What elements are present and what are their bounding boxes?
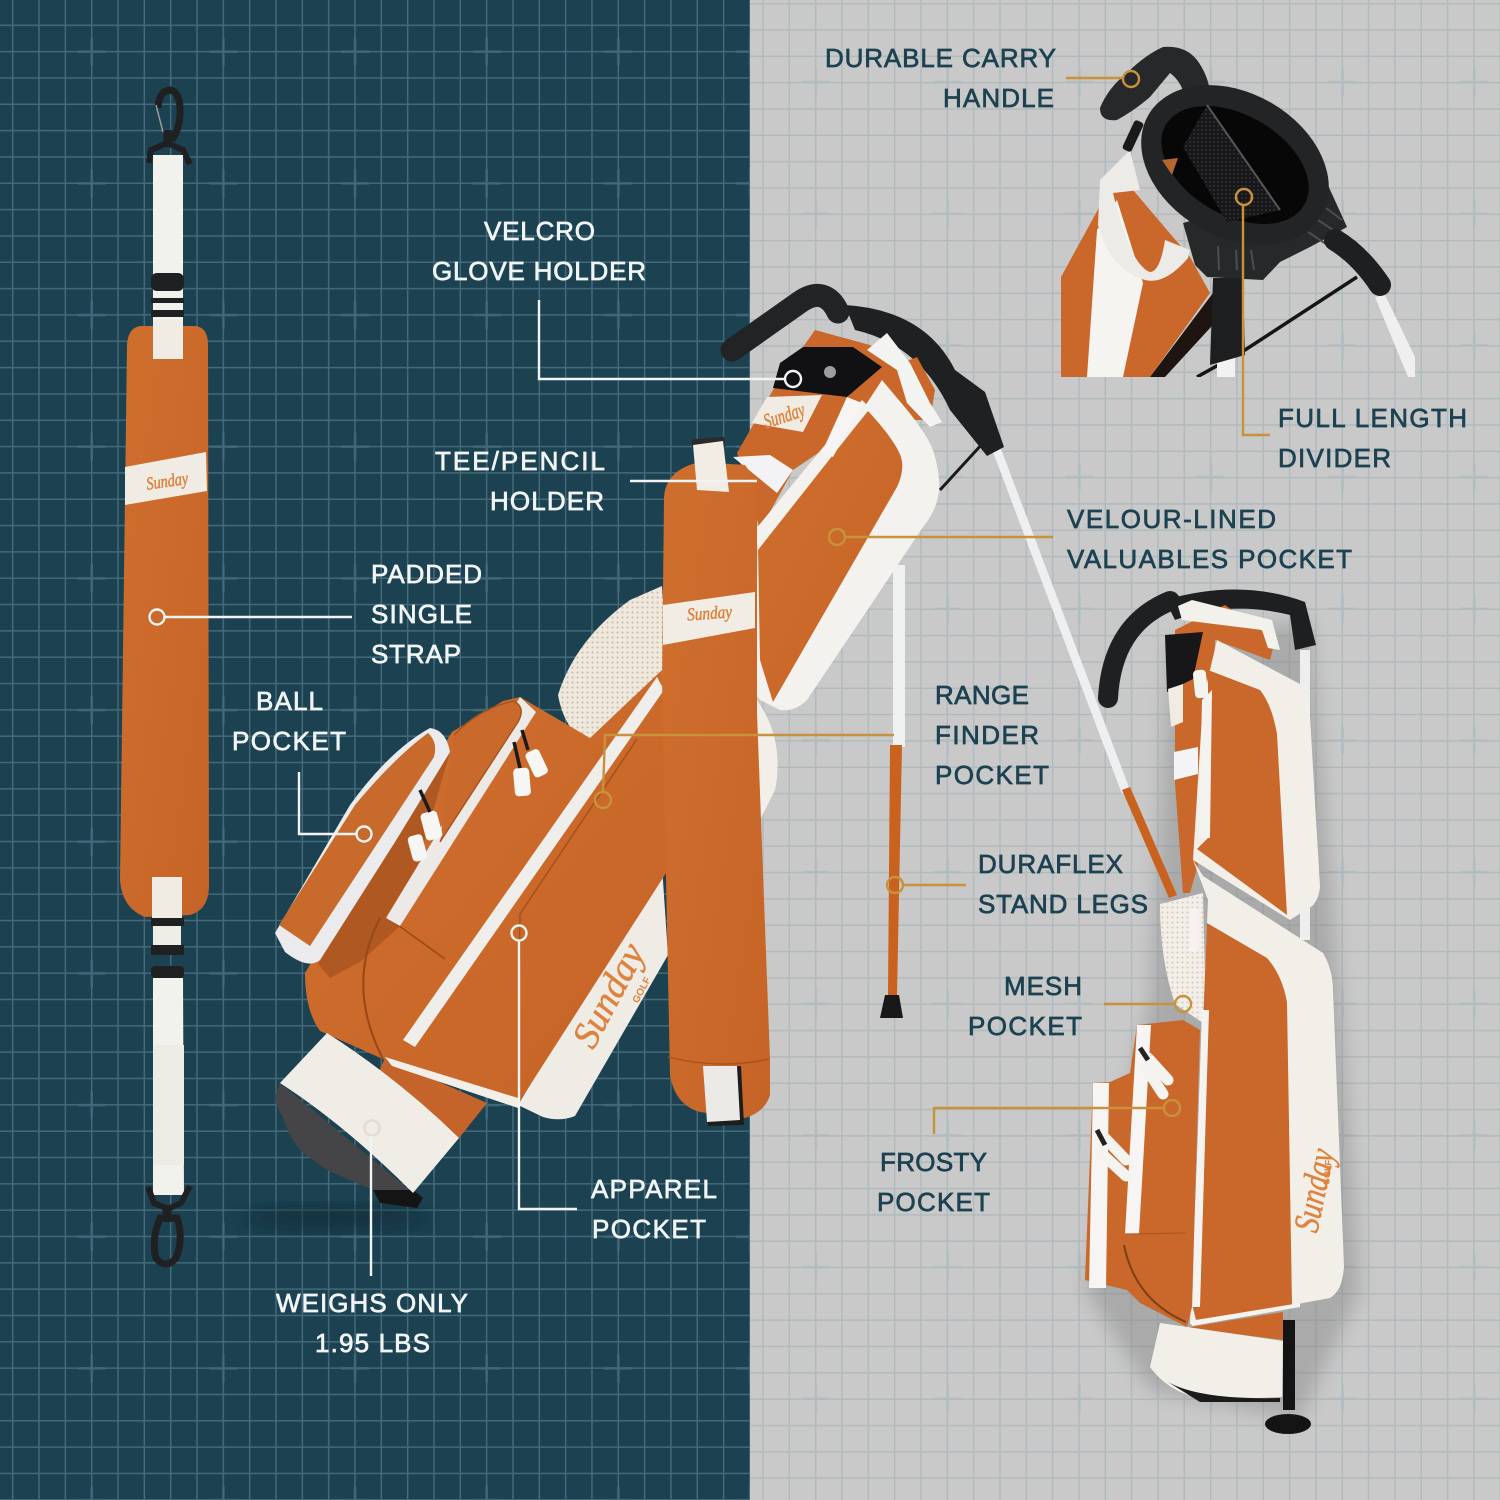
mesh divider [1183,105,1280,222]
label: weighs only: WEIGHS ONLY [276,1288,468,1318]
neck bracket [1210,278,1245,365]
upper orange pocket [1197,670,1287,915]
small label [1168,684,1183,727]
collar orange [737,330,935,530]
second zip strip [386,697,536,926]
upper white panel [755,380,939,710]
lower white panel [518,866,668,1119]
right leg tip [1375,295,1415,377]
label: range finder pocket: POCKET [935,760,1049,790]
bracket ribs [1218,208,1342,270]
side clip [1122,120,1144,152]
white hem [1190,1303,1300,1326]
callout: range finder pocket [595,735,894,808]
callout: weight [364,1120,380,1276]
label: range finder pocket: RANGE [935,680,1029,710]
rim crescent and bracket [845,305,1004,456]
label: durable carry handle: DURABLE CARRY [825,43,1056,73]
front stand leg [880,565,905,1018]
strap top tab [153,320,183,359]
middle pocket seam [363,918,383,1059]
strap logo band [663,592,755,645]
top rim [1165,589,1316,650]
illustration: detached padded strap [120,90,209,1264]
rear white curve [755,700,778,830]
label: velour-lined valuables pocket: VELOUR-LINED [1067,504,1276,534]
carry handle [1100,47,1210,120]
lower zip strip [1192,1010,1209,1307]
hoop orange [375,1058,487,1138]
main logo: Sunday [564,936,654,1055]
label: mesh pocket: MESH [1004,971,1082,1001]
rear stand leg [1300,650,1310,940]
strap bottom tab [703,1066,744,1126]
side logo: Sunday [1286,1145,1342,1235]
illustration: right side view of bag [1085,589,1360,1434]
upper zip pull [1193,669,1208,699]
label: duraflex stand legs: DURAFLEX [978,849,1123,879]
callout: tee pencil holder [630,480,757,482]
callout: valuables pocket [829,529,1053,545]
outer rim [1141,85,1329,222]
top webbing [153,155,183,360]
rear stand leg [940,443,1177,898]
carry handle [732,295,838,350]
inner opening [1161,106,1309,224]
strap pad [120,326,209,917]
label: range finder pocket: FINDER [935,720,1039,750]
icon: bottom carabiner [148,1186,190,1264]
apparel pocket seam [519,739,637,990]
upper orange pocket [758,411,902,702]
strap label band: Sunday [145,468,189,494]
label: durable carry handle: HANDLE [943,83,1054,113]
strap seam [668,1057,769,1064]
main logo: GOLF [631,975,654,1005]
callout: stand legs [887,877,966,893]
label: weighs only: 1.95 LBS [315,1328,430,1358]
lower white panel [1190,860,1344,1324]
lower webbing [153,978,184,1195]
stand foot [1265,1320,1311,1434]
callout: frosty pocket [934,1100,1180,1134]
label: frosty pocket: POCKET [877,1187,990,1217]
icon: top carabiner [149,90,190,164]
shoulder strap [662,462,770,1118]
callout: padded strap [150,610,352,624]
label: tee pencil holder: TEE/PENCIL [435,446,605,476]
soft shadow [1085,620,1360,1420]
ball pocket [275,728,450,964]
strap top tab [693,441,729,492]
zip pulls [407,748,549,862]
white hem sliver [385,1057,518,1108]
dark fold [318,752,450,978]
white carry strap [867,333,942,427]
mesh pocket [1160,893,1206,1025]
upper zip strip [755,400,870,550]
top logo label: Sunday [760,397,808,433]
velcro patch [773,347,882,397]
left white panel [1087,200,1143,377]
strap label band [125,452,207,505]
white hoop [280,1033,459,1193]
label: mesh pocket: POCKET [968,1011,1082,1041]
hoop base [1150,1312,1283,1402]
white velcro flap [733,455,793,493]
velcro patch [1165,632,1203,692]
label: padded single strap: SINGLE [371,599,472,629]
label: apparel pocket: POCKET [592,1214,706,1244]
label: velcro glove holder: VELCRO [484,216,595,246]
zipper hardware [420,730,528,812]
mesh pocket [558,586,668,755]
apparel zip strip [403,677,664,1047]
rim bracket [1183,183,1347,280]
illustration: main angled bag [240,295,1177,1230]
white leg stub [1217,358,1235,377]
callout: ball pocket [299,772,372,842]
bottom black base [275,1083,423,1208]
label: duraflex stand legs: STAND LEGS [978,889,1148,919]
frosty front pocket [1085,1020,1200,1327]
label: tee pencil holder: HOLDER [490,486,604,516]
label: padded single strap: STRAP [371,639,461,669]
background: grey blueprint grid [750,0,1500,1500]
callout: apparel pocket [512,926,577,1209]
leg arm [1335,240,1380,285]
zip hardware [1097,1048,1148,1145]
lower tab [152,877,182,919]
callout: mesh pocket [1104,996,1191,1012]
orange glimpse [1162,158,1178,175]
side logo: GOLF [1321,1159,1333,1185]
middle pocket flap edge [388,918,445,959]
upper zip strip [1199,690,1212,838]
label: padded single strap: PADDED [371,559,482,589]
callout: velcro glove holder [539,300,801,387]
strap top buckle [692,437,725,450]
label: full length divider: DIVIDER [1278,443,1391,473]
lower buckle [151,918,184,978]
label: velour-lined valuables pocket: VALUABLES POCKET [1067,544,1352,574]
strap loop [1174,747,1198,780]
strap logo band: Sunday [686,601,733,625]
label: full length divider: FULL LENGTH [1278,403,1467,433]
callout: divider [1236,189,1270,435]
label: ball pocket: BALL [256,686,323,716]
callout lines: white [150,300,801,1276]
bag orange body [1061,190,1210,377]
lower orange body [305,670,668,1104]
background: navy blueprint grid [0,0,750,1500]
callout: carry handle [1066,71,1139,87]
ground shadow [240,1206,430,1230]
label: ball pocket: POCKET [232,726,346,756]
collar orange [1175,605,1275,893]
lower orange panel [1192,923,1292,1320]
top buckle [151,273,184,317]
label: apparel pocket: APPAREL [591,1174,717,1204]
callout lines: gold [595,71,1270,1134]
zip pull [822,397,862,457]
dark side band [1150,294,1212,377]
white collar mesh [1098,150,1190,281]
handle [1108,601,1170,698]
label: frosty pocket: FROSTY [880,1147,987,1177]
illustration: top view detail of bag opening [1061,47,1415,377]
second pocket lobe [440,701,521,842]
zip pulls [1100,912,1194,1176]
upper white panel [1193,640,1320,920]
label: velcro glove holder: GLOVE HOLDER [432,256,646,286]
side rods [1197,277,1357,377]
white top strap [1178,600,1280,650]
